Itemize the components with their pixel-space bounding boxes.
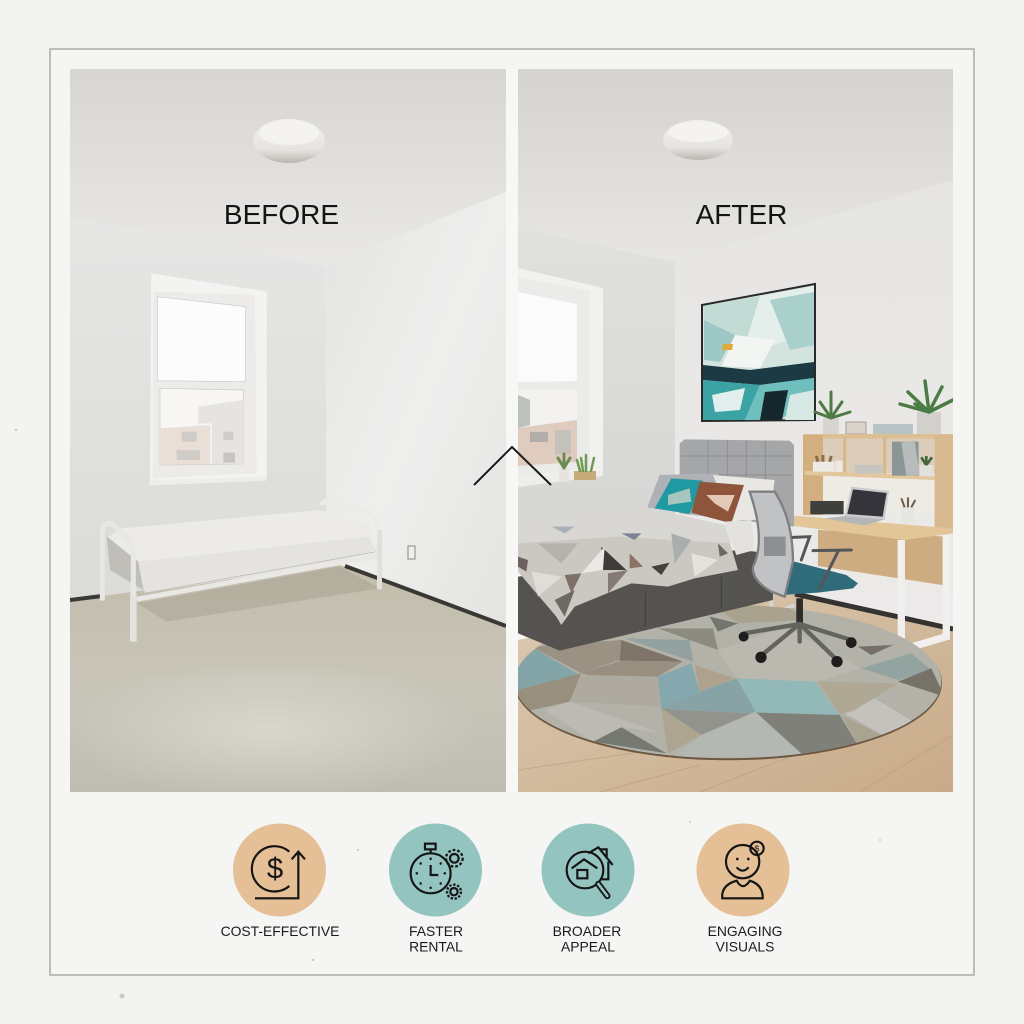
front headboard xyxy=(102,524,133,601)
floor glare xyxy=(132,686,407,776)
buildings outside xyxy=(518,420,577,466)
icon: house and magnifier xyxy=(542,824,634,916)
duvet xyxy=(518,507,738,625)
right wall xyxy=(326,192,506,630)
baseboard xyxy=(795,594,953,629)
window xyxy=(149,273,267,486)
shelf books xyxy=(892,442,919,476)
shelf plants and objects xyxy=(815,381,953,434)
sill plants xyxy=(558,454,596,482)
wall socket xyxy=(408,546,415,559)
benefit: broader appeal xyxy=(542,824,634,954)
armrests xyxy=(793,537,851,588)
left wall xyxy=(518,228,675,530)
legs xyxy=(130,593,137,642)
icon: stopwatch and gears xyxy=(389,824,482,916)
chevron divider marker xyxy=(474,447,551,485)
right wall xyxy=(675,180,953,640)
label: BROADER xyxy=(553,923,621,939)
ceiling lamp xyxy=(663,120,733,160)
label: VISUALS xyxy=(716,938,774,954)
wood plank lines xyxy=(518,735,953,792)
seat xyxy=(771,562,858,595)
rail xyxy=(136,562,340,602)
label: FASTER xyxy=(409,923,463,939)
ceiling xyxy=(70,69,506,266)
heading: after: AFTER xyxy=(696,199,787,230)
pencil cup xyxy=(901,497,915,524)
buildings outside xyxy=(160,400,243,465)
wall painting xyxy=(702,284,815,421)
panel: after room xyxy=(511,69,953,792)
chair sled leg xyxy=(769,594,796,608)
icon: rising dollar coin: $ xyxy=(267,853,283,886)
desk books xyxy=(810,501,844,514)
rug xyxy=(511,600,951,763)
label: ENGAGING xyxy=(708,923,782,939)
icon: smiling person with dollar bubble: $ xyxy=(755,843,760,853)
office chair xyxy=(739,492,858,667)
desk and hutch xyxy=(771,434,953,650)
ceiling xyxy=(518,69,953,262)
benefit: faster rental xyxy=(389,824,482,954)
heading: before: BEFORE xyxy=(224,199,339,230)
chair base xyxy=(739,598,857,667)
modesty panel xyxy=(818,530,946,586)
label: COST-EFFECTIVE xyxy=(221,923,339,939)
wood floor xyxy=(518,590,953,792)
left wall xyxy=(70,218,340,600)
backrest xyxy=(750,492,793,597)
window xyxy=(518,268,603,487)
mattress xyxy=(108,510,332,592)
floor xyxy=(70,565,506,792)
label: RENTAL xyxy=(409,938,463,954)
panel divider xyxy=(506,69,518,792)
back headboard xyxy=(322,501,379,588)
label: APPEAL xyxy=(561,938,615,954)
benefit: engaging visuals xyxy=(696,824,790,954)
white leg xyxy=(901,535,946,650)
desk top xyxy=(786,515,953,540)
bed xyxy=(102,501,382,642)
baseboard xyxy=(70,566,506,626)
panel: before room xyxy=(60,69,506,800)
headboard xyxy=(680,439,794,527)
benefit: cost-effective xyxy=(221,824,339,939)
ceiling lamp xyxy=(253,119,325,163)
paper specks xyxy=(15,429,881,998)
pillows xyxy=(647,473,775,523)
mattress edge xyxy=(725,520,755,555)
bed with duvet xyxy=(518,439,794,651)
laptop xyxy=(825,487,889,525)
bed base xyxy=(518,550,773,651)
